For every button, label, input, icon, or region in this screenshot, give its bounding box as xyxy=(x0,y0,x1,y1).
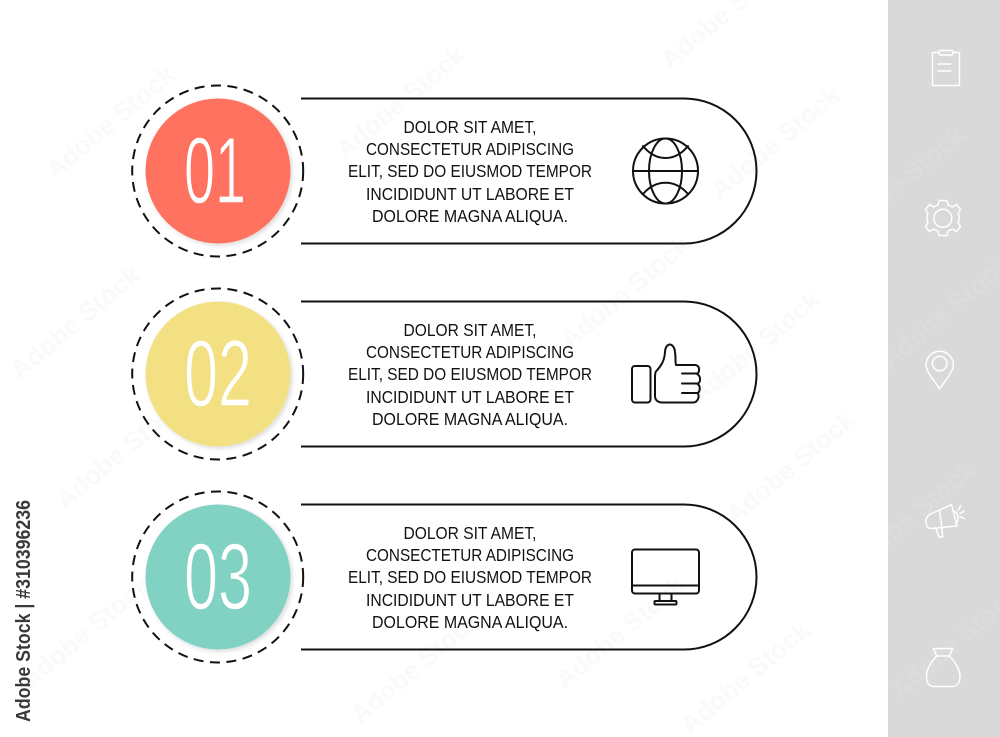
pill outline xyxy=(301,302,756,446)
text block: DOLORE MAGNA ALIQUA. xyxy=(372,612,568,632)
text block: ELIT, SED DO EIUSMOD TEMPOR xyxy=(348,364,592,384)
stock id label: Adobe Stock | #310396236 xyxy=(13,500,35,722)
text block: DOLOR SIT AMET, xyxy=(404,320,536,340)
icon: gear xyxy=(926,200,960,236)
text block: ELIT, SED DO EIUSMOD TEMPOR xyxy=(348,161,592,181)
icon: globe xyxy=(633,138,698,204)
pill outline xyxy=(301,504,756,650)
dashed ring xyxy=(132,492,303,662)
number: 03: 03 xyxy=(184,524,252,630)
watermark: Adobe Stock pattern: Adobe Stock xyxy=(550,569,691,695)
number circle: 03 xyxy=(146,504,290,650)
watermark: Adobe Stock pattern: Adobe Stock xyxy=(705,79,846,205)
text block: DOLORE MAGNA ALIQUA. xyxy=(372,409,568,429)
number circle: 02 xyxy=(146,302,290,446)
number: 02: 02 xyxy=(184,321,252,427)
icon: map pin xyxy=(926,351,953,389)
dashed ring xyxy=(132,86,303,256)
text block xyxy=(348,320,592,429)
sidebar panel: Adobe Stock xyxy=(840,454,981,580)
number circle: 01 xyxy=(146,98,290,244)
watermark: Adobe Stock pattern: Adobe Stock xyxy=(5,259,146,385)
watermark: Adobe Stock pattern: Adobe Stock xyxy=(555,229,696,355)
text block: CONSECTETUR ADIPISCING xyxy=(366,545,574,565)
text block: INCIDIDUNT UT LABORE ET xyxy=(366,184,574,204)
watermark: Adobe Stock pattern: Adobe Stock xyxy=(330,39,471,165)
text block xyxy=(348,117,592,226)
text block: INCIDIDUNT UT LABORE ET xyxy=(366,590,574,610)
watermark: Adobe Stock pattern: Adobe Stock xyxy=(720,404,861,530)
watermark: Adobe Stock pattern: Adobe Stock xyxy=(50,389,191,515)
watermark: Adobe Stock pattern: Adobe Stock xyxy=(40,59,181,185)
text block: DOLOR SIT AMET, xyxy=(404,117,536,137)
step 3 xyxy=(132,492,756,662)
watermark: Adobe Stock pattern: Adobe Stock xyxy=(15,569,156,695)
text block: DOLORE MAGNA ALIQUA. xyxy=(372,206,568,226)
icon: sack xyxy=(926,648,960,686)
watermark: Adobe Stock pattern: Adobe Stock xyxy=(345,604,486,730)
icon: monitor xyxy=(632,550,699,604)
watermark: Adobe Stock pattern: Adobe Stock xyxy=(685,284,826,410)
sidebar panel xyxy=(888,0,1000,737)
step 1 xyxy=(132,86,756,256)
dashed ring xyxy=(132,288,303,460)
sidebar panel: Adobe Stock xyxy=(830,119,971,245)
step 2 xyxy=(132,288,756,460)
icon: megaphone xyxy=(926,504,964,537)
number: 01: 01 xyxy=(184,118,246,224)
text block: ELIT, SED DO EIUSMOD TEMPOR xyxy=(348,567,592,587)
pill outline xyxy=(301,98,756,244)
text block: CONSECTETUR ADIPISCING xyxy=(366,342,574,362)
text block: CONSECTETUR ADIPISCING xyxy=(366,139,574,159)
watermark: Adobe Stock pattern: Adobe Stock xyxy=(675,614,816,737)
text block: INCIDIDUNT UT LABORE ET xyxy=(366,387,574,407)
icon: thumbs up xyxy=(632,344,700,402)
text block xyxy=(348,523,592,632)
text block: DOLOR SIT AMET, xyxy=(404,523,536,543)
icon: clipboard xyxy=(932,50,960,86)
